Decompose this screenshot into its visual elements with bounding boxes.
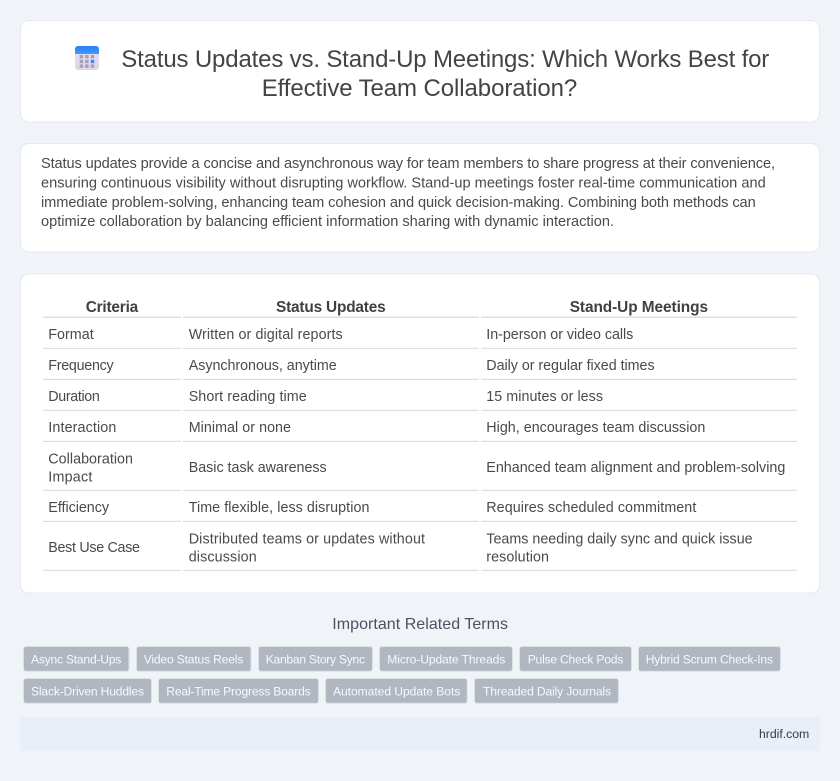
icon: calendar <box>75 46 99 70</box>
row: format: In-person or video calls <box>486 327 633 343</box>
tag: Slack-Driven Huddles <box>31 684 144 698</box>
table header: Criteria <box>86 299 139 316</box>
row: efficiency <box>48 500 696 516</box>
row: duration: Short reading time <box>189 389 307 405</box>
title <box>121 46 769 102</box>
tag: Threaded Daily Journals <box>483 684 611 698</box>
tag: Pulse Check Pods <box>528 652 623 666</box>
row: interaction: Interaction <box>48 420 116 436</box>
tag <box>24 646 129 671</box>
tag <box>520 646 632 671</box>
panel: comparison table <box>20 274 820 593</box>
row: interaction: Minimal or none <box>189 420 291 436</box>
table header: Stand-Up Meetings <box>570 299 708 316</box>
row: interaction: High, encourages team discussion <box>486 420 705 436</box>
row: best use case <box>48 531 753 565</box>
table header <box>86 299 708 316</box>
tag <box>158 678 318 703</box>
row: duration <box>48 389 603 405</box>
row: format: Written or digital reports <box>189 327 343 343</box>
tag <box>638 646 780 671</box>
row: interaction <box>48 420 705 436</box>
row: efficiency: Efficiency <box>48 500 110 516</box>
row: frequency: Asynchronous, anytime <box>189 358 337 374</box>
row: efficiency: Requires scheduled commitment <box>486 500 696 516</box>
row: best use case: Best Use Case <box>48 540 140 556</box>
tag <box>24 678 152 703</box>
tag: Automated Update Bots <box>333 684 460 698</box>
title: Effective Team Collaboration? <box>262 75 577 102</box>
summary paragraph: immediate problem-solving, enhancing team cohesion and quick decision-making. Combining both methods can <box>41 195 756 211</box>
row: duration: Duration <box>48 389 100 405</box>
summary paragraph: ensuring continuous visibility without disrupting workflow. Stand-up meetings foster real-time communication and <box>41 176 766 192</box>
row: collaboration impact: Impact <box>48 469 92 485</box>
tag <box>380 646 512 671</box>
tag <box>258 646 372 671</box>
row: collaboration impact: Enhanced team alignment and problem-solving <box>486 460 785 476</box>
tag: Micro-Update Threads <box>387 652 505 666</box>
footer <box>20 717 820 751</box>
tag <box>474 678 618 703</box>
tag: Real-Time Progress Boards <box>166 684 311 698</box>
row: collaboration impact <box>48 451 785 485</box>
table header: Status Updates <box>276 299 386 316</box>
row: collaboration impact: Collaboration <box>48 451 133 467</box>
row: best use case: discussion <box>189 549 257 565</box>
row: frequency: Frequency <box>48 358 115 374</box>
row: best use case: resolution <box>486 549 549 565</box>
title: Status Updates vs. Stand-Up Meetings: Which Works Best for <box>121 46 769 73</box>
row: collaboration impact: Basic task awareness <box>189 460 327 476</box>
footer: hrdif.com <box>759 727 809 741</box>
row: frequency <box>48 358 655 374</box>
tag: Kanban Story Sync <box>266 652 365 666</box>
row: efficiency: Time flexible, less disruption <box>189 500 369 516</box>
tags: related terms <box>24 646 780 703</box>
summary paragraph <box>41 156 775 230</box>
tag: Hybrid Scrum Check-Ins <box>646 652 773 666</box>
tag <box>326 678 467 703</box>
row: frequency: Daily or regular fixed times <box>486 358 655 374</box>
tag: Async Stand-Ups <box>31 652 121 666</box>
tag: Video Status Reels <box>144 652 243 666</box>
tag <box>136 646 251 671</box>
row: best use case: Distributed teams or updates without <box>189 531 425 547</box>
row: duration: 15 minutes or less <box>486 389 603 405</box>
row: format: Format <box>48 327 94 343</box>
heading: important related terms: Important Related Terms <box>332 616 508 633</box>
row: best use case: Teams needing daily sync and quick issue <box>486 531 753 547</box>
summary paragraph: Status updates provide a concise and asynchronous way for team members to share progress at their convenience, <box>41 156 775 172</box>
summary paragraph: optimize collaboration by balancing efficient information sharing with dynamic interaction. <box>41 214 614 230</box>
row: format <box>48 327 633 343</box>
panel: summary <box>20 144 820 252</box>
panel: title header <box>20 20 820 122</box>
